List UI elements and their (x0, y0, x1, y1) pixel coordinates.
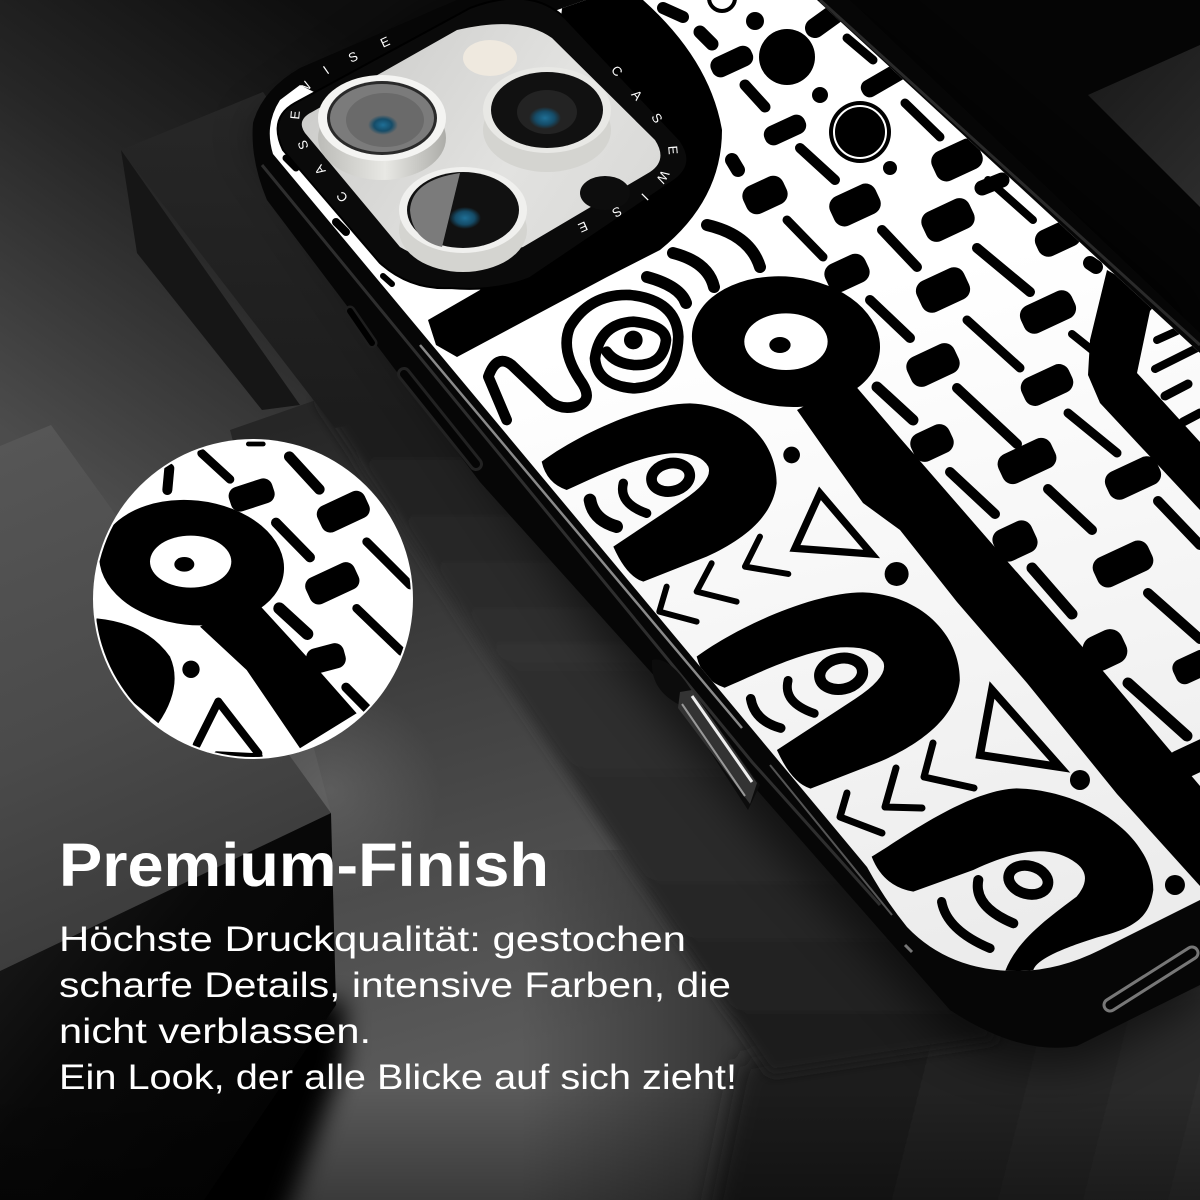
brand text CASEWISE on rim: W (653, 168, 673, 187)
brand text CASEWISE on rim: W (295, 78, 315, 97)
brand text CASEWISE on rim: S (346, 48, 360, 66)
brand text CASEWISE on rim: C (608, 63, 626, 79)
body copy: Ein Look, der alle Blicke auf sich zieht! (59, 1058, 737, 1097)
pattern: specks beside camera rim (286, 158, 392, 284)
flash (463, 40, 517, 76)
lens bottom (399, 167, 527, 272)
brand text CASEWISE on rim: S (609, 203, 624, 221)
pattern: first arch with eye (542, 403, 909, 622)
phone case body (253, 0, 1200, 1048)
magnified pattern (87, 444, 410, 756)
pattern: rounded blocks (707, 43, 1200, 783)
pattern: third arch with eye (872, 770, 1185, 972)
pattern: spiral and wave (488, 295, 678, 420)
brand text CASEWISE on rim: A (628, 87, 646, 103)
body copy (59, 920, 737, 1097)
brand text CASEWISE on rim: C (333, 189, 351, 205)
lens top left (318, 75, 446, 180)
brand text CASEWISE on rim: E (287, 110, 303, 120)
pattern: small arcs (647, 225, 760, 303)
camera module (278, 0, 687, 289)
brand text CASEWISE on rim: A (311, 162, 329, 178)
background: upper right dark zone (720, 0, 1200, 500)
magnifier circle (87, 439, 413, 759)
camera bump rim (278, 0, 687, 289)
lens top right (483, 67, 611, 172)
brand text CASEWISE on rim: I (320, 63, 332, 77)
body copy: nicht verblassen. (59, 1012, 371, 1051)
brand text CASEWISE on rim: E (665, 145, 681, 155)
pattern: large eye and stem (685, 267, 1200, 886)
pattern: second arch with eye (697, 592, 960, 789)
pattern: arch around camera (428, 0, 722, 357)
pattern: second triangle and chevrons (840, 690, 1060, 833)
sensor (580, 176, 630, 210)
brand text CASEWISE on rim: E (576, 218, 590, 236)
brand text CASEWISE on rim: E (378, 33, 392, 51)
phone shadow (252, 0, 1200, 1064)
camera glass (302, 24, 660, 259)
brand text CASEWISE on rim: I (638, 190, 652, 204)
pattern: S-curve right (1088, 270, 1200, 510)
brand text CASEWISE on rim (287, 33, 681, 236)
case edge highlights (262, 0, 1200, 952)
pattern: thin dashes (663, 8, 1200, 736)
charging port (1110, 953, 1192, 1005)
side button: volume (404, 374, 476, 464)
body copy: Höchste Druckqualität: gestochen (59, 920, 686, 959)
printed screen background (270, 0, 1200, 971)
printed black and white pattern (286, 0, 1200, 972)
brand text CASEWISE on rim: S (648, 110, 666, 126)
background: centre plinth face (121, 92, 1000, 1075)
side button: mute (350, 311, 372, 343)
side button: silver (652, 659, 760, 810)
brand text CASEWISE on rim: S (294, 138, 312, 152)
background: left plinth (0, 425, 1200, 1200)
heading: Premium-Finish (59, 831, 549, 899)
pattern: dots and circles top (709, 0, 897, 175)
body copy: scharfe Details, intensive Farben, die (59, 966, 731, 1005)
